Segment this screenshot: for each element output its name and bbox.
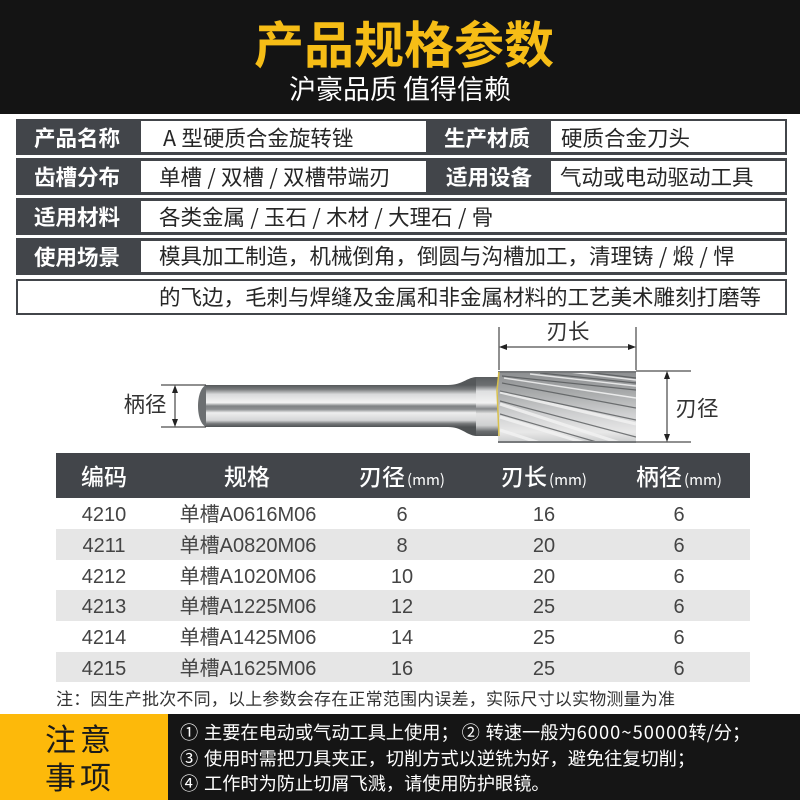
text: product name: A 型硬质合金旋转锉	[163, 122, 353, 153]
table row 4214: 14	[391, 627, 413, 649]
table row 4212: 单槽A1020M06	[180, 566, 316, 588]
table row 4211: 4211	[82, 535, 126, 557]
dimension: blade diameter	[636, 371, 691, 442]
table header	[56, 453, 750, 498]
table header: 柄径(mm)	[636, 458, 722, 492]
table row 4212: 4212	[82, 566, 126, 588]
notice heading	[0, 714, 168, 800]
table footnote: 注：因生产批次不同，以上参数会存在正常范围内误差，实际尺寸以实物测量为准	[56, 685, 675, 710]
table row 4210	[82, 504, 685, 526]
notice panel	[0, 714, 800, 800]
table row 4210: 单槽A0616M06	[180, 504, 316, 526]
table row 4210: 6	[396, 504, 408, 526]
table row 4211: 8	[396, 535, 408, 557]
notice line 2: ③	[180, 745, 198, 771]
table row 4214	[82, 627, 685, 649]
table row 4212	[82, 566, 685, 588]
burr cutting head	[498, 371, 636, 443]
notice heading: 注意	[45, 715, 115, 760]
table row 4211: 6	[673, 535, 685, 557]
table row 4213: 6	[673, 596, 685, 618]
product diagram: carbide burr with dimensions	[123, 318, 719, 443]
table row 4214: 4214	[82, 627, 126, 649]
label: flutes	[16, 158, 141, 195]
notice line 3: 工作时为防止切屑飞溅，请使用防护眼镜。	[204, 770, 550, 796]
text: usage line 2: 的飞边，毛刺与焊缝及金属和非金属材料的工艺美术雕刻打磨等	[159, 281, 761, 312]
text: flutes: 单槽 / 双槽 / 双槽带端刃	[159, 161, 391, 192]
notice line 1: ②	[462, 719, 480, 745]
value box: usage	[141, 241, 785, 272]
label: flutes: 齿槽分布	[34, 161, 120, 192]
label: product name: 产品名称	[34, 122, 120, 153]
notice line 1: 主要在电动或气动工具上使用； 转速一般为6000~50000转/分；	[204, 719, 750, 745]
title: 产品规格参数	[254, 6, 554, 78]
spec row: usage	[16, 238, 787, 275]
label: product name	[16, 119, 141, 155]
table row 4215: 16	[391, 658, 413, 680]
table row 4215: 单槽A1625M06	[180, 658, 316, 680]
label: materials	[16, 198, 141, 235]
label: equipment	[426, 158, 551, 195]
text: usage line 1: 模具加工制造，机械倒角，倒圆与沟槽加工，清理铸 / 煅 / 悍	[159, 240, 735, 271]
table row 4214: 单槽A1425M06	[180, 627, 316, 649]
spec row: materials	[16, 198, 787, 235]
table row 4215	[56, 652, 750, 682]
burr shank	[198, 377, 499, 436]
table header: 刃径(mm)	[359, 458, 445, 492]
text: material: 硬质合金刀头	[561, 122, 690, 153]
table row 4213	[56, 590, 750, 621]
spec row: usage continued	[16, 279, 787, 315]
notice line 1: ①	[180, 719, 198, 745]
text: materials: 各类金属 / 玉石 / 木材 / 大理石 / 骨	[159, 201, 493, 232]
label: material: 生产材质	[444, 122, 530, 153]
label: materials: 适用材料	[34, 201, 120, 232]
table row 4215: 6	[673, 658, 685, 680]
spec row: product name and material	[16, 119, 787, 155]
table row 4213: 25	[533, 596, 555, 618]
spec table	[56, 453, 750, 498]
value box: flutes	[141, 161, 426, 192]
brazed yellow joint	[497, 372, 499, 436]
value box: equipment	[551, 161, 785, 192]
table header: 刃长(mm)	[501, 458, 587, 492]
table row 4211: 20	[533, 535, 555, 557]
text: equipment: 气动或电动驱动工具	[560, 161, 754, 192]
table row 4210: 6	[673, 504, 685, 526]
table row 4211	[56, 529, 750, 560]
table row 4211: 单槽A0820M06	[180, 535, 316, 557]
dimension: blade length	[499, 327, 636, 370]
notice heading: 事项	[45, 753, 115, 798]
table row 4210: 4210	[82, 504, 126, 526]
table row 4212: 6	[673, 566, 685, 588]
dimension: shank diameter	[161, 385, 206, 427]
table row 4213: 单槽A1225M06	[180, 596, 316, 618]
table row 4210: 16	[533, 504, 555, 526]
table row 4214: 6	[673, 627, 685, 649]
table row 4212: 10	[391, 566, 413, 588]
label: equipment: 适用设备	[446, 161, 532, 192]
label: usage	[16, 238, 141, 275]
table row 4215: 25	[533, 658, 555, 680]
table row 4213: 4213	[82, 596, 126, 618]
label: shank diameter: 柄径	[123, 388, 167, 419]
value: material	[551, 121, 785, 152]
table row 4214: 25	[533, 627, 555, 649]
header banner	[0, 0, 800, 114]
table row 4213: 12	[391, 596, 413, 618]
table row 4215: 4215	[82, 658, 126, 680]
table header: 规格	[224, 458, 270, 492]
value box: materials	[141, 201, 785, 232]
spec row: flutes and equipment	[16, 158, 787, 195]
notice line 3: ④	[180, 770, 198, 796]
subtitle: 沪豪品质 值得信赖	[289, 68, 511, 107]
value: product name	[141, 121, 426, 152]
table header: 编码	[81, 458, 127, 492]
table row 4212: 20	[533, 566, 555, 588]
label: blade diameter: 刃径	[675, 392, 719, 423]
label: usage: 使用场景	[34, 241, 120, 272]
label: material	[426, 119, 551, 155]
notice line 2: 使用时需把刀具夹正，切削方式以逆铣为好，避免往复切削；	[204, 745, 695, 771]
